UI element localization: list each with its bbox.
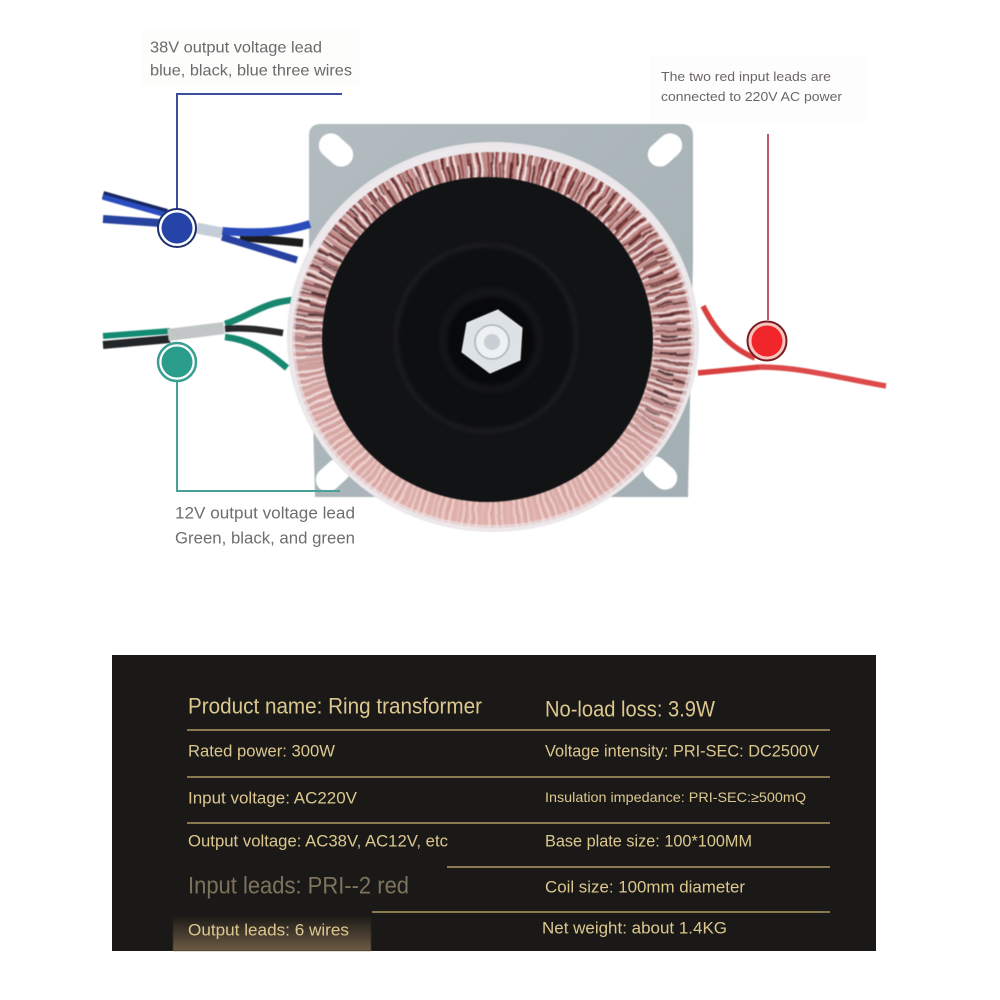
annotation: red input leads: The two red input leads are [661, 69, 831, 84]
hex nut and bolt [462, 310, 522, 373]
plastic wrap [287, 142, 699, 532]
spec table text: Output leads: 6 wires [188, 920, 349, 940]
spec table text: Net weight: about 1.4KG [542, 918, 727, 938]
spec table text: Coil size: 100mm diameter [545, 878, 745, 896]
marker: teal [158, 343, 196, 381]
winding hatching [299, 158, 683, 522]
toroidal copper coil [287, 142, 699, 532]
spec table text: Product name: Ring transformer [188, 694, 482, 718]
black steel disc [322, 177, 653, 502]
spec table text [188, 694, 820, 940]
spec table text: Output voltage: AC38V, AC12V, etc [188, 832, 448, 850]
output leads glow patch [173, 915, 371, 951]
teal leader line [177, 382, 340, 491]
spec table text: Base plate size: 100*100MM [545, 832, 752, 850]
annotation: 38V output voltage lead: 38V output voltage lead [150, 40, 322, 56]
annotation: 12V output voltage lead: Green, black, and green [175, 528, 355, 548]
centre dome ring [396, 245, 576, 431]
mounting plate [309, 124, 693, 497]
annotation: 12V output voltage lead [175, 504, 355, 548]
mounting hole: bottom left [311, 453, 355, 497]
annotation: 38V output voltage lead [142, 28, 360, 86]
spec table text: Input leads: PRI--2 red [188, 872, 409, 900]
spec table text: Voltage intensity: PRI-SEC: DC2500V [545, 742, 820, 760]
marker: red [748, 322, 786, 360]
inner recess [439, 287, 543, 393]
red leader line [767, 134, 769, 320]
wire tape [168, 328, 224, 335]
transformer photo illustration [103, 124, 886, 532]
mounting hole: bottom right [638, 451, 682, 495]
blue leader line [177, 94, 342, 210]
annotation: 38V output voltage lead: blue, black, blue three wires [150, 62, 352, 80]
row dividers [187, 730, 830, 912]
spec table text: Insulation impedance: PRI-SEC:≥500mQ [545, 789, 806, 805]
spec table text: Rated power: 300W [188, 742, 335, 760]
annotation: 12V output voltage lead: 12V output voltage lead [175, 504, 355, 522]
mounting hole: top right [643, 128, 687, 172]
green output wires [103, 300, 292, 368]
blue output wires [103, 195, 310, 260]
panel: specifications [112, 655, 876, 951]
spec table text: Input voltage: AC220V [188, 788, 358, 808]
wire tape [197, 228, 222, 233]
mounting hole: top left [314, 128, 358, 172]
marker: blue [158, 209, 196, 247]
annotation: red input leads [650, 56, 868, 122]
spec table text: No-load loss: 3.9W [545, 696, 715, 722]
annotation: red input leads: connected to 220V AC power [661, 89, 843, 104]
red input wires [698, 306, 886, 386]
